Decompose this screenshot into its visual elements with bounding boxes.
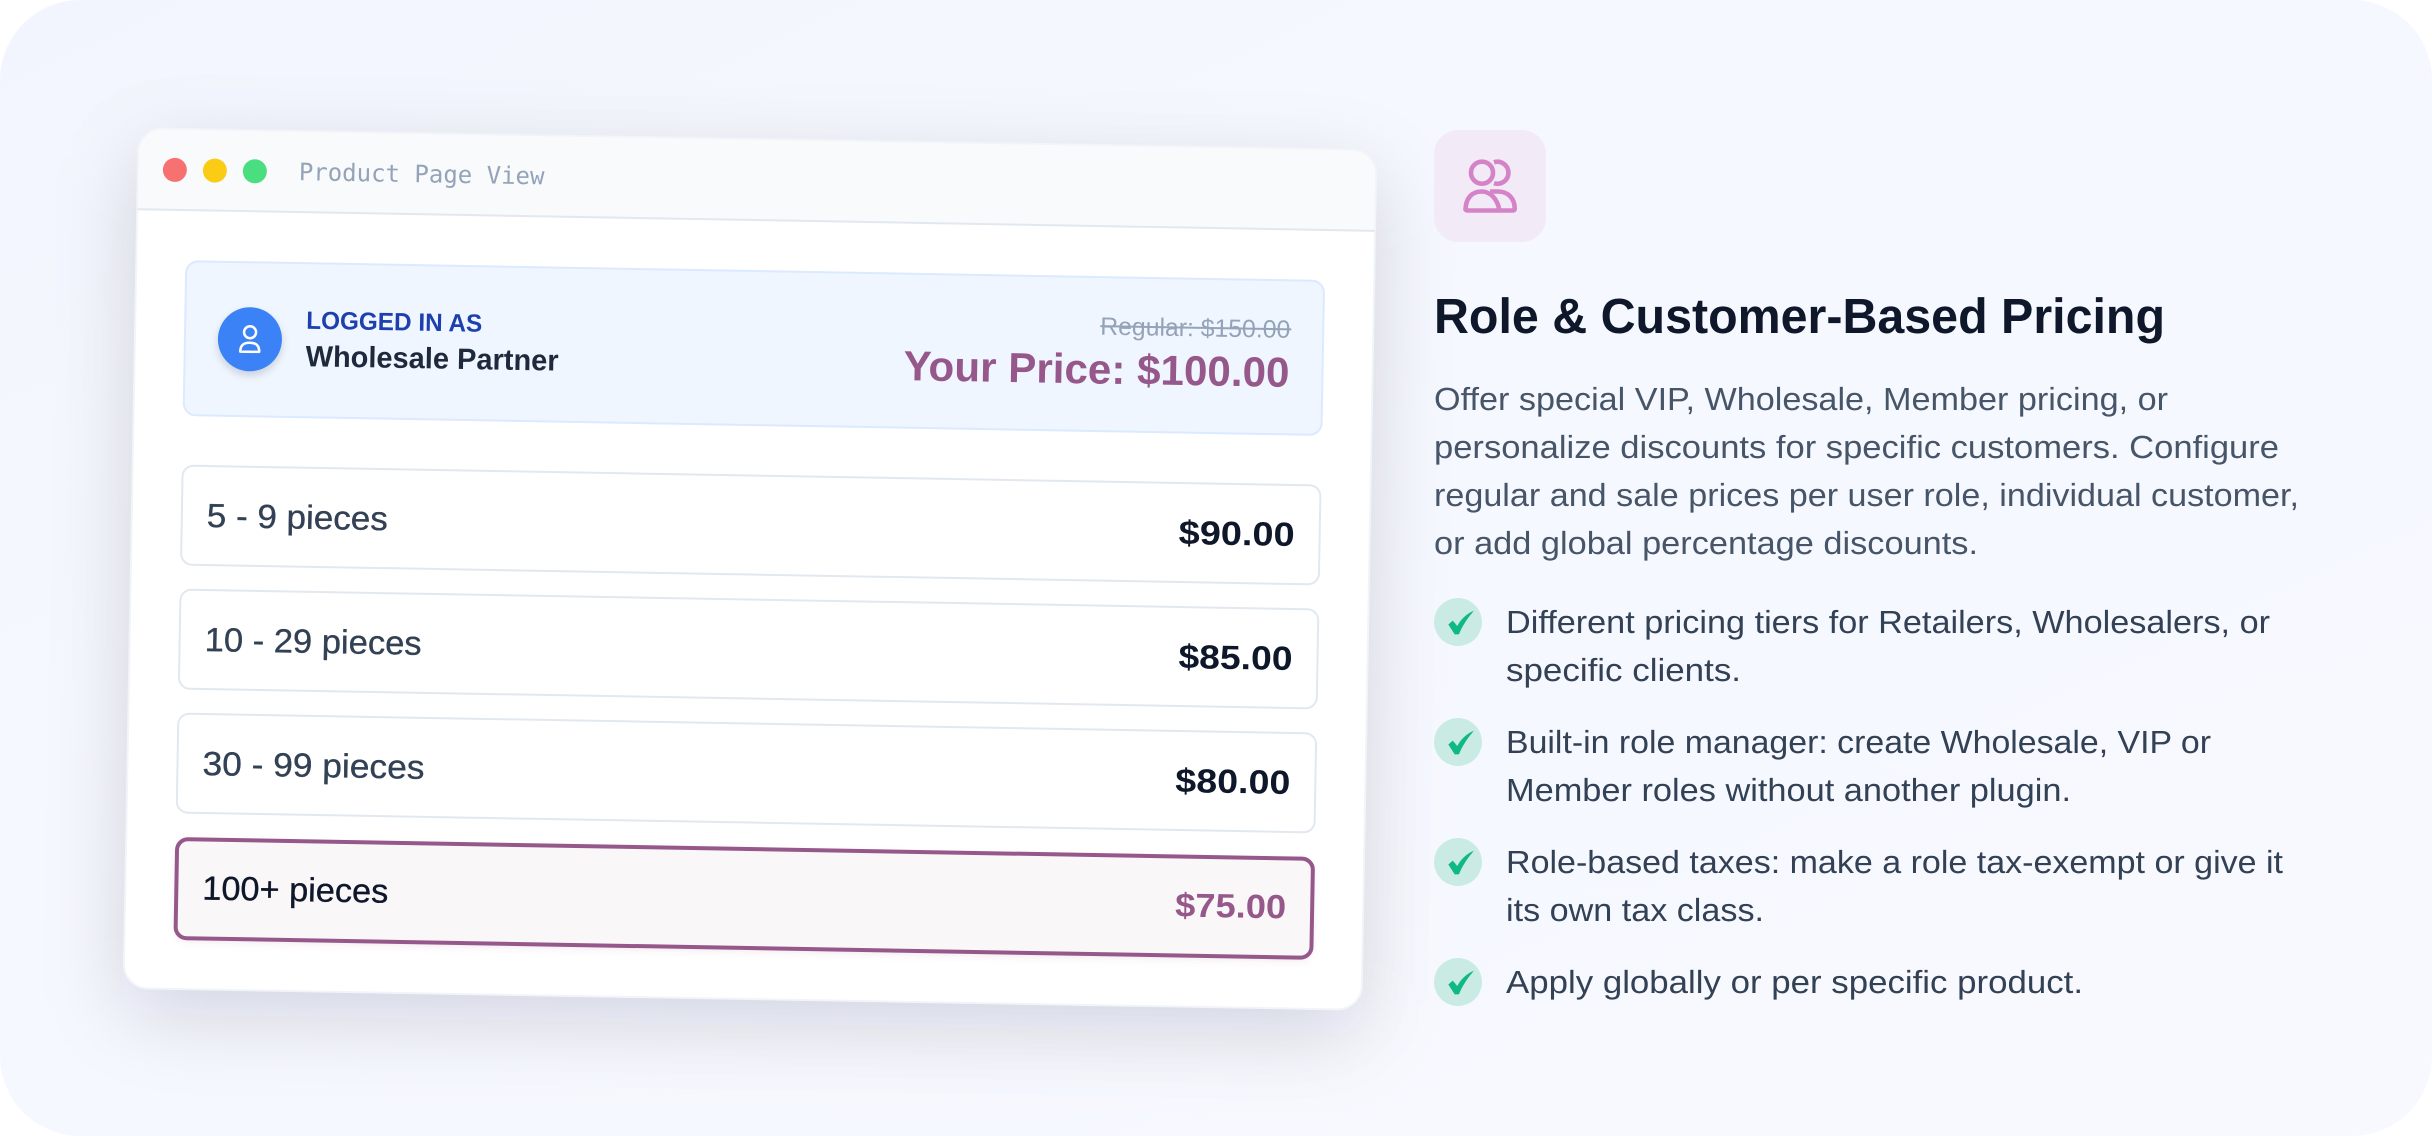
tier price: $80.00 <box>1175 763 1291 802</box>
item text: Apply globally or per specific product. <box>1506 964 2083 1000</box>
avatar circle <box>217 307 282 372</box>
pricing tier: 100+ pieces highlighted <box>175 839 1313 961</box>
row box <box>181 466 1321 584</box>
check badge <box>1434 718 1482 766</box>
feature: role-based taxes <box>1434 838 2283 928</box>
back user body <box>1466 192 1515 210</box>
front user body <box>1466 192 1500 210</box>
green window dot <box>243 159 267 184</box>
title bar divider <box>137 209 1375 231</box>
card shadow <box>123 153 1376 1035</box>
description paragraph <box>1434 381 2299 561</box>
item text line 2: its own tax class. <box>1506 892 1764 928</box>
role name: Wholesale Partner <box>305 340 559 378</box>
icon: user avatar <box>217 307 282 376</box>
tier price: $85.00 <box>1178 639 1293 678</box>
avatar shadow <box>217 311 282 376</box>
feature: global or per product <box>1434 958 2083 1006</box>
item text line 1: Built-in role manager: create Wholesale, VIP or <box>1506 724 2211 760</box>
window title bar <box>137 129 1376 231</box>
row box <box>175 839 1313 958</box>
line 4: or add global percentage discounts. <box>1434 525 1978 561</box>
title bar fill <box>138 129 1375 231</box>
item text line 2: specific clients. <box>1506 652 1741 688</box>
tier price: $90.00 <box>1178 515 1295 554</box>
avatar head <box>244 326 256 338</box>
logged in label: LOGGED IN AS <box>306 307 482 338</box>
quantity label: 30 - 99 pieces <box>202 746 425 787</box>
back user head <box>1494 162 1508 184</box>
quantity label: 100+ pieces <box>202 870 389 911</box>
card body <box>124 128 1376 1010</box>
line 1: Offer special VIP, Wholesale, Member pricing, or <box>1434 381 2168 417</box>
tier price: $75.00 <box>1175 887 1286 926</box>
quantity label: 10 - 29 pieces <box>204 622 422 663</box>
your price: Your Price: $100.00 <box>903 342 1290 396</box>
feature: pricing tiers <box>1434 598 2270 688</box>
check badge <box>1434 598 1482 646</box>
regular price struck through <box>1100 313 1291 344</box>
front user head <box>1471 162 1493 184</box>
icon tile <box>1434 130 1546 242</box>
browser window card <box>123 128 1376 1035</box>
icon: check mark <box>1448 611 1474 634</box>
pricing tier: 30-99 pieces <box>177 714 1316 832</box>
highlight glow <box>175 842 1313 961</box>
row box <box>177 714 1316 832</box>
icon: check mark <box>1448 731 1474 754</box>
regular price text: Regular: $150.00 <box>1100 313 1290 344</box>
line 3: regular and sale prices per user role, individual customer, <box>1434 477 2299 513</box>
strikethrough line <box>1100 326 1291 329</box>
pricing tier: 10-29 pieces <box>179 590 1318 708</box>
check badge <box>1434 838 1482 886</box>
row box <box>179 590 1318 708</box>
check badge <box>1434 958 1482 1006</box>
item text line 1: Different pricing tiers for Retailers, Wholesalers, or <box>1506 604 2270 640</box>
logged-in user banner <box>184 261 1324 435</box>
item text line 1: Role-based taxes: make a role tax-exempt or give it <box>1506 844 2283 880</box>
icon: check mark <box>1448 971 1474 994</box>
icon: two users <box>1434 130 1546 242</box>
yellow window dot <box>203 158 227 183</box>
quantity label: 5 - 9 pieces <box>207 498 388 538</box>
window title text: Product Page View <box>299 158 545 190</box>
avatar shoulders <box>240 343 259 352</box>
red window dot <box>163 158 187 182</box>
feature: role manager <box>1434 718 2211 808</box>
banner background <box>184 261 1324 435</box>
icon: check mark <box>1448 851 1474 874</box>
heading: Role & Customer-Based Pricing <box>1434 289 2165 344</box>
pricing tier: 5-9 pieces <box>181 466 1321 584</box>
item text line 2: Member roles without another plugin. <box>1506 772 2071 808</box>
line 2: personalize discounts for specific customers. Configure <box>1434 429 2279 465</box>
